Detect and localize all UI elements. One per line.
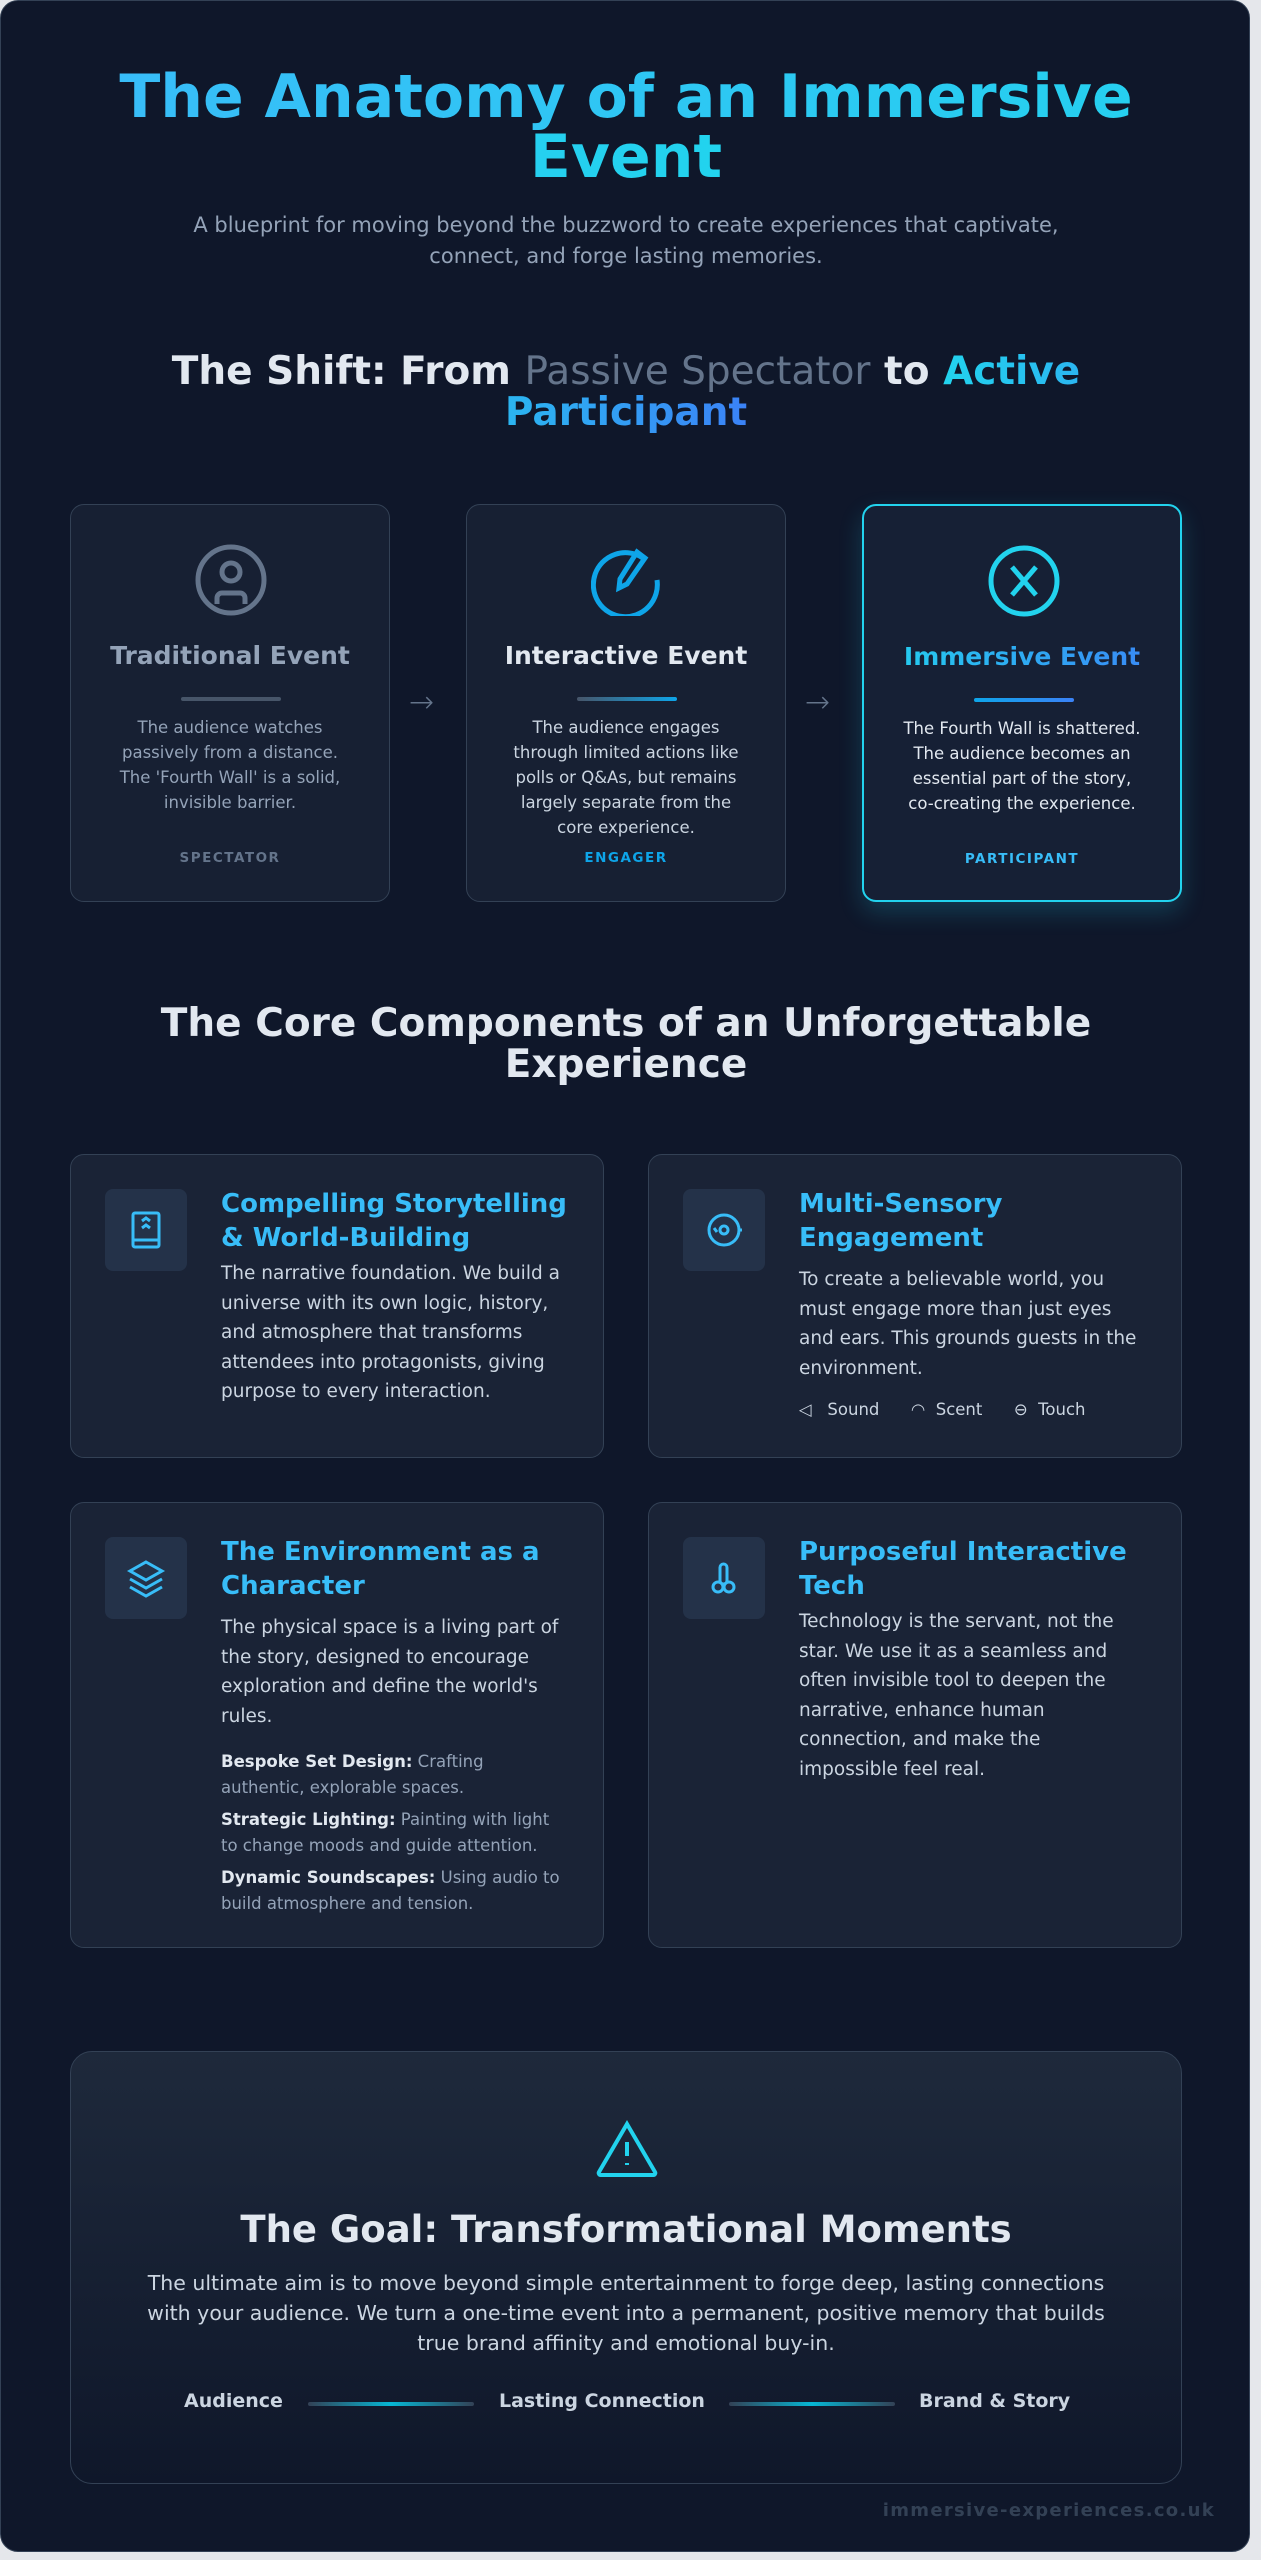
subtitle: A blueprint for moving beyond the buzzword to create experiences that captivate, connect, and forge lasting memories. xyxy=(193,213,1059,268)
panel: storytelling: The narrative foundation. We build a universe with its own logic, history, and atmosphere that transforms attendees into protagonists, giving purpose to every interaction. xyxy=(221,1263,560,1402)
icon: layers xyxy=(105,1537,187,1619)
arrow: → xyxy=(805,685,830,720)
panel: storytelling: Compelling Storytelling & World-Building xyxy=(221,1189,567,1253)
goal title: The Goal: Transformational Moments xyxy=(240,2208,1012,2251)
panel: interactive event: Interactive Event xyxy=(505,641,747,670)
arrow: → xyxy=(409,685,434,720)
panel: environment xyxy=(70,1502,604,1948)
goal text: The ultimate aim is to move beyond simple entertainment to forge deep, lasting connections with your audience. We turn a one-time event into a permanent, positive memory that builds true brand affinity and emotional buy-in. xyxy=(147,2271,1105,2355)
panel: interactive tech: Technology is the servant, not the star. We use it as a seamless and often invisible tool to deepen the narrative, enhance human connection, and make the impossible feel real. xyxy=(799,1611,1114,1780)
heading: the shift: The Shift: From Passive Spectator to Active Participant xyxy=(172,349,1080,435)
panel: storytelling xyxy=(70,1154,604,1458)
heading: core components: The Core Components of an Unforgettable Experience xyxy=(161,1001,1091,1087)
panel: interactive tech: Purposeful Interactive Tech xyxy=(799,1537,1127,1601)
panel: traditional event: The audience watches passively from a distance. The 'Fourth Wall' is a solid, invisible barrier. xyxy=(120,718,340,812)
flow: audience to brand xyxy=(184,2390,1070,2412)
icon: touch xyxy=(683,1537,765,1619)
panel: the goal xyxy=(70,2051,1182,2484)
panel: interactive event: ENGAGER xyxy=(584,850,668,866)
panel: environment: The physical space is a living part of the story, designed to encourage exploration and define the world's rules. xyxy=(221,1617,558,1726)
panel: multi-sensory xyxy=(648,1154,1182,1458)
panel: interactive event: The audience engages through limited actions like polls or Q&As, but remains largely separate from the core experience. xyxy=(513,718,739,837)
panel: immersive event xyxy=(862,504,1182,902)
flow: audience to brand: Audience xyxy=(184,2390,283,2412)
panel: environment: The Environment as a Character xyxy=(221,1537,540,1601)
icon: user xyxy=(196,544,266,616)
panel: traditional event: SPECTATOR xyxy=(180,850,280,866)
panel: traditional event: Traditional Event xyxy=(110,641,350,670)
panel: immersive event: PARTICIPANT xyxy=(965,851,1079,867)
footer url: immersive-experiences.co.uk xyxy=(883,2500,1215,2521)
panel: environment: Dynamic Soundscapes: Using audio to build atmosphere and tension. xyxy=(221,1868,560,1913)
icon: sensory xyxy=(683,1189,765,1271)
flow: audience to brand: Brand & Story xyxy=(919,2390,1070,2412)
panel: multi-sensory: To create a believable world, you must engage more than just eyes and ears. This grounds guests in the environment. xyxy=(799,1269,1136,1378)
sense tags: ◁ Sound ◠ Scent ⊖ Touch xyxy=(799,1400,1086,1419)
panel: interactive tech xyxy=(648,1502,1182,1948)
panel: environment: Bespoke Set Design: Crafting authentic, explorable spaces. xyxy=(221,1752,484,1797)
panel: immersive event: The Fourth Wall is shattered. The audience becomes an essential part of the story, co-creating the experience. xyxy=(903,719,1141,813)
panel: traditional event xyxy=(70,504,390,902)
panel: immersive event: Immersive Event xyxy=(904,642,1140,671)
icon: x circle xyxy=(988,546,1060,616)
title: The Anatomy of an Immersive Event xyxy=(119,62,1133,192)
flow: audience to brand: Lasting Connection xyxy=(499,2390,705,2412)
panel: environment: Strategic Lighting: Painting with light to change moods and guide attention. xyxy=(221,1810,549,1855)
icon: book xyxy=(105,1189,187,1271)
panel: interactive event xyxy=(466,504,786,902)
icon: interaction xyxy=(591,548,660,616)
icon: warning triangle xyxy=(596,2120,658,2177)
panel: multi-sensory: Multi-Sensory Engagement xyxy=(799,1189,1002,1253)
